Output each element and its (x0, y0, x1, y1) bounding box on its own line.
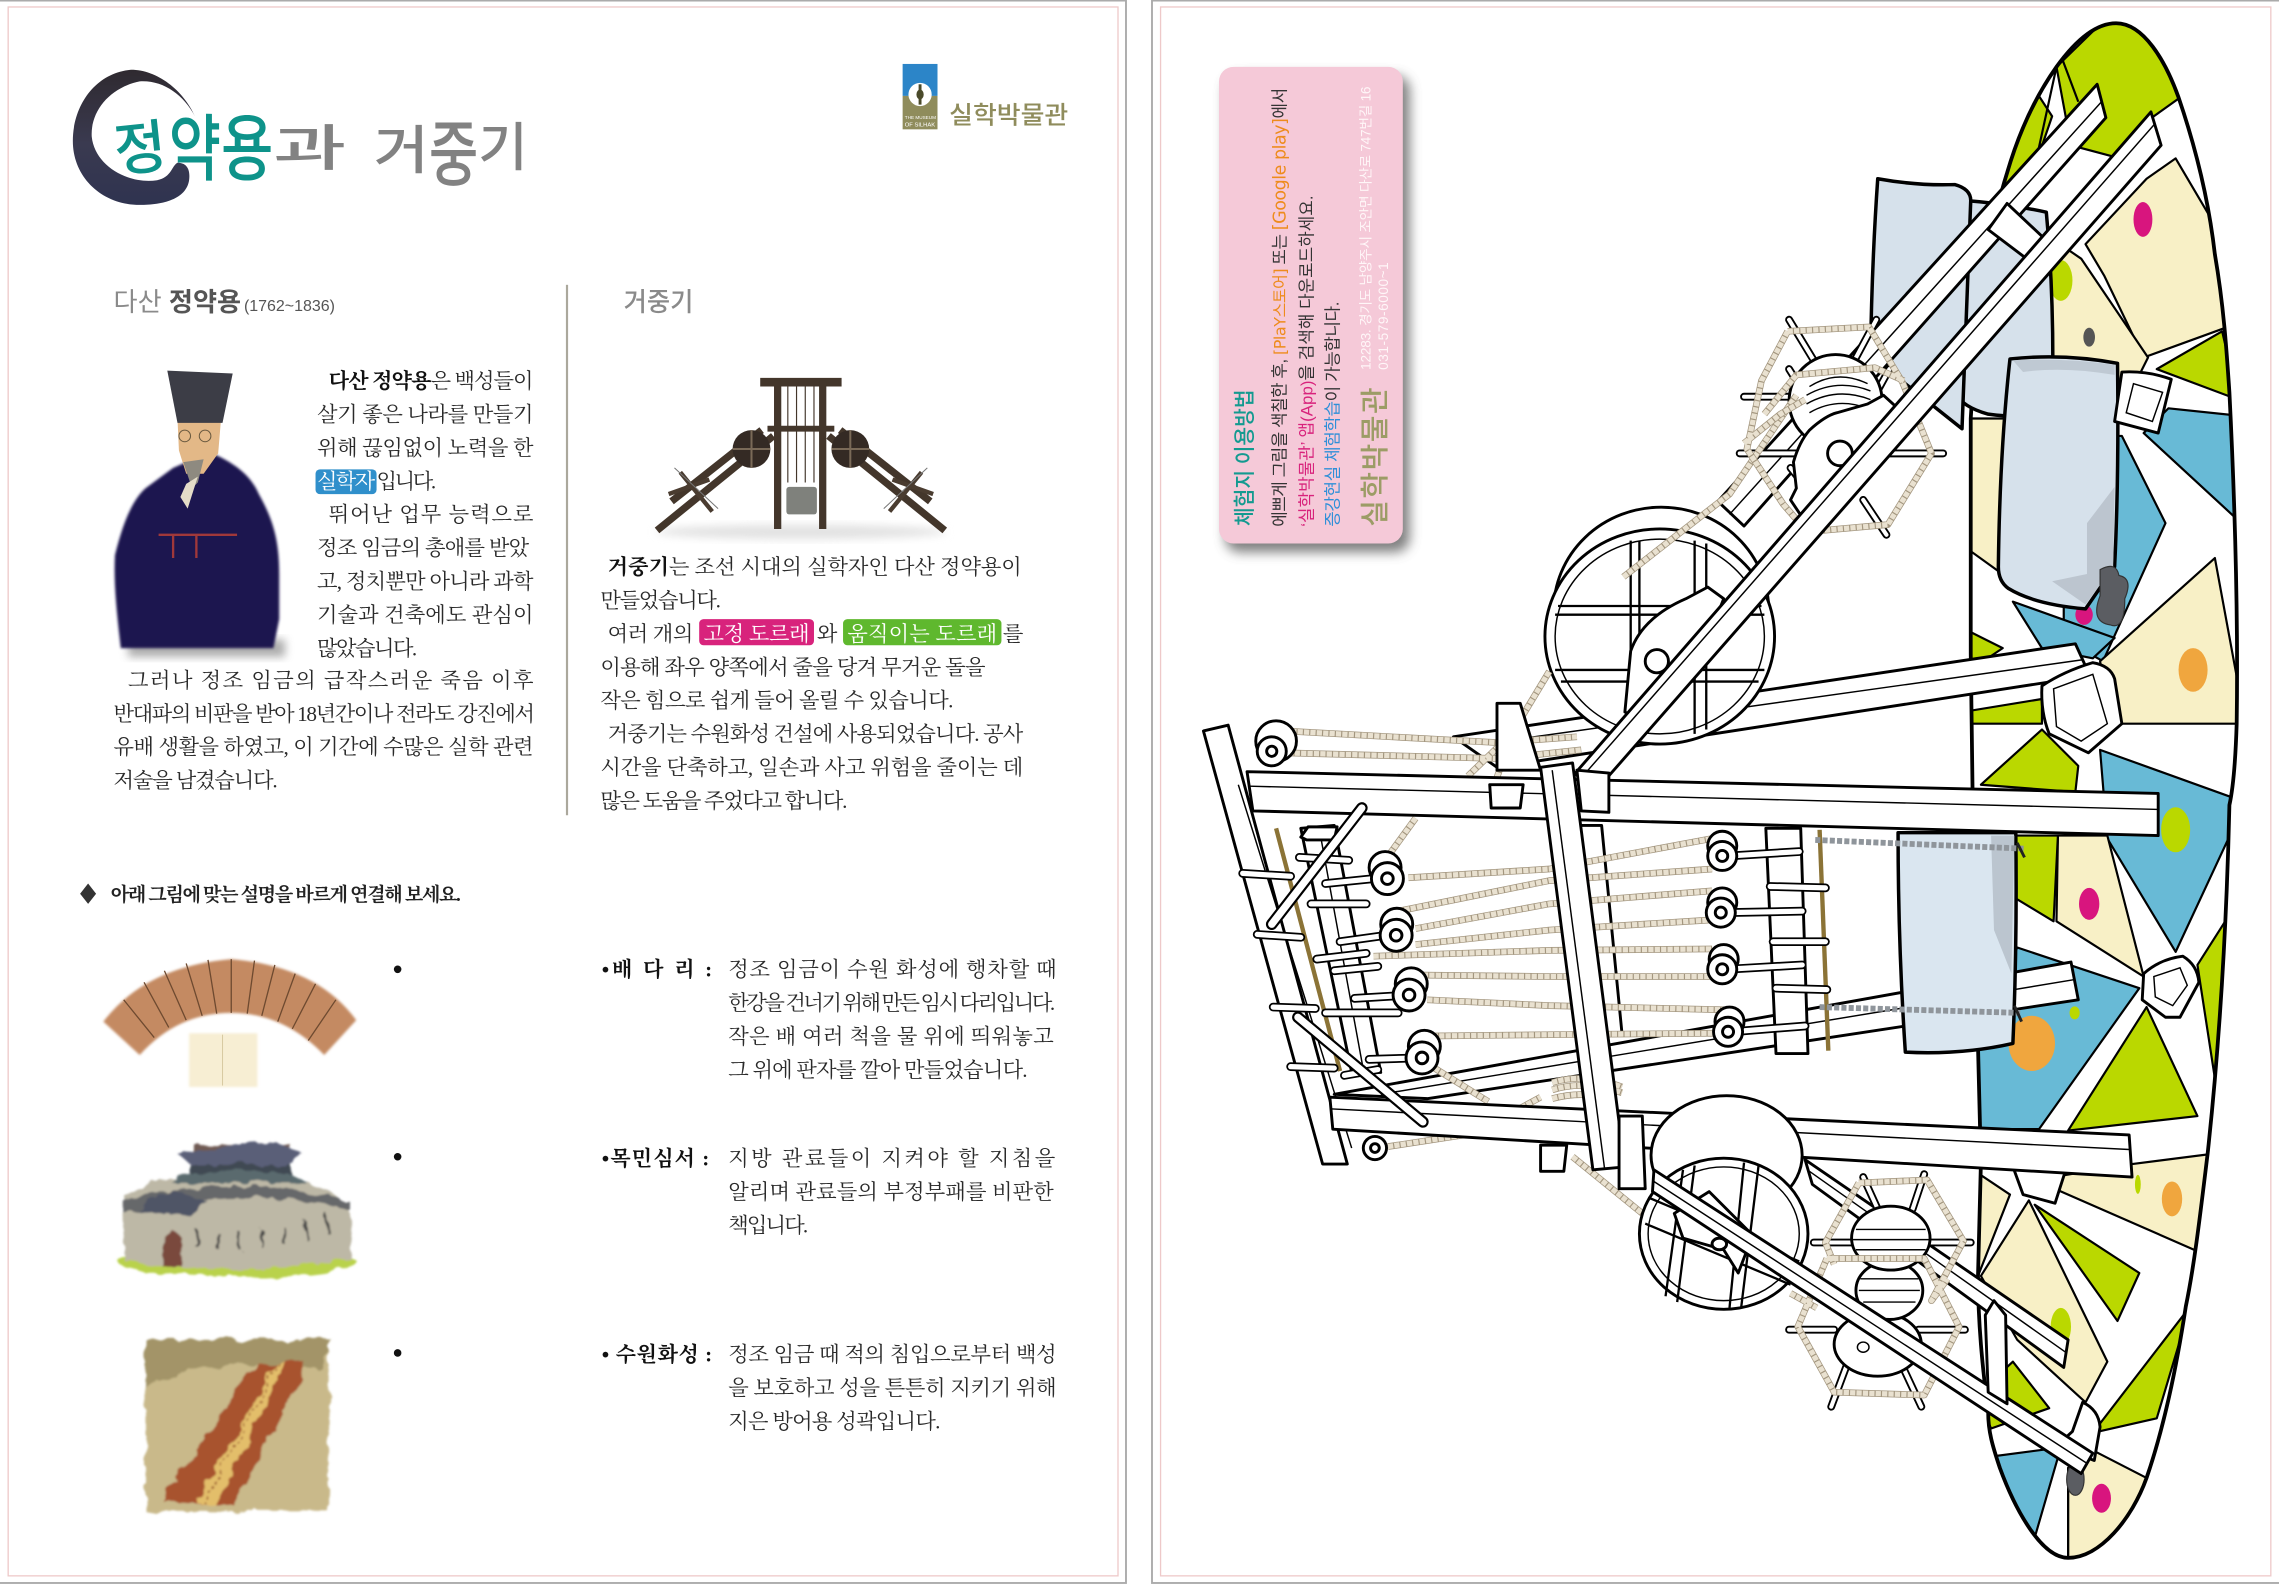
term: 수원화성: • 수원화성 : (602, 1343, 712, 1367)
icon: museum emblem: OF SILHAK (905, 122, 935, 128)
text block: 거중기 explanation: 만들었습니다. (600, 588, 721, 612)
icon: ink brush circle (73, 70, 195, 205)
title text: 정약용: 용 (221, 109, 273, 190)
text block: 거중기 explanation: 고정 도르래 (704, 622, 810, 646)
small blocks (1490, 770, 1645, 1189)
upper inner beam (1718, 84, 2106, 526)
text block: 거중기 explanation: 이용해 좌우 양쪽에서 줄을 당겨 무거운 돌을 (600, 655, 986, 679)
term: 배다리: 한강을 건너기 위해 만든 임시 다리입니다. (728, 991, 1055, 1015)
text block: 거중기 explanation: 를 (1003, 622, 1024, 646)
text block: 거중기 explanation: 거중기는 조선 시대의 실학자인 다산 정약용이 (608, 554, 1022, 579)
front stone on the oval (1998, 357, 2118, 609)
photo: geojunggi model (656, 381, 946, 539)
title text: 정약용: 정 (111, 114, 170, 184)
clamps on the oval (2011, 372, 2199, 1460)
suspended stone with chains (1815, 833, 2025, 1053)
icon: museum emblem (903, 64, 938, 129)
centre vertical post (1541, 763, 1625, 1170)
title text: 정약용: 약 (169, 109, 221, 190)
icon: diamond bullet (80, 884, 96, 904)
card instructions: ‘실학박물관’ 앱(App)을 검색해 다운로드하세요. (1297, 195, 1316, 527)
lower guide rail (1334, 962, 2078, 1099)
upper large wheel (1545, 507, 1775, 744)
text block: 정약용 biography: 위해 끊임없이 노력을 한 (317, 436, 534, 460)
museum name: 실학박물관 (1359, 387, 1392, 527)
term: 수원화성: 지은 방어용 성곽입니다. (728, 1410, 940, 1434)
card instructions: 증강현실 체험학습이 가능합니다. (1324, 302, 1343, 527)
wheel bracket and hub (1625, 395, 1901, 719)
term: 목민심서: 지방 관료들이 지켜야 할 지침을 (728, 1146, 1056, 1170)
right pulley column (1727, 828, 1827, 1054)
title text: 과 거중기: 중 (429, 115, 478, 196)
icon: museum emblem: THE MUSEUM (905, 115, 936, 120)
main upper arm beam (1574, 112, 2161, 777)
term: 배다리: 작은 배 여러 척을 물 위에 띄워놓고 (728, 1024, 1054, 1048)
highlight: 고정 도르래 (699, 619, 814, 645)
rope around lower winch (1791, 1180, 1963, 1395)
term: 배다리: •배 다 리 : (602, 958, 712, 982)
card heading: 체험지 이용방법 (1232, 389, 1257, 526)
upper long beam (1247, 772, 2158, 836)
right pulleys (1706, 831, 1744, 1046)
term: 목민심서: 책입니다. (728, 1213, 808, 1237)
text block: 거중기 explanation: 거중기는 수원화성 건설에 사용되었습니다. 공사 (608, 722, 1024, 746)
lower wheel back (1651, 1096, 1802, 1215)
heading: 다산 정약용: 다산 정약용 (1762~1836) (114, 287, 335, 317)
text block: 정약용 biography: 입니다. (377, 469, 436, 493)
address and phone: 12283. 경기도 남양주시 조안면 다산로 747번길 16 (1359, 86, 1374, 370)
text block: 정약용 biography: 기술과 건축에도 관심이 (317, 603, 534, 627)
text block: 정약용 biography: 뛰어난 업무 능력으로 (329, 503, 534, 527)
title text: 과 거중기: 기 (478, 120, 528, 178)
logo: museum of Silhak (903, 64, 1068, 130)
text block: 정약용 biography: 유배 생활을 하였고, 이 기간에 수많은 실학 관련 (114, 735, 534, 759)
upper guide rail (1453, 644, 2090, 767)
term: 수원화성 (602, 1343, 1057, 1434)
text block: 정약용 biography: 살기 좋은 나라를 만들기 (317, 402, 534, 426)
left pulleys (1369, 852, 1440, 1074)
connector dots (394, 966, 401, 1357)
column divider (566, 285, 568, 815)
title text: 정약용 (111, 109, 273, 190)
logo name: 실학박물관 (949, 102, 1068, 130)
title text: 과 거중기 (273, 115, 528, 196)
term: 목민심서 (602, 1146, 1056, 1237)
text block: 정약용 biography: 반대파의 비판을 받아 18년간이나 전라도 강진에서 (114, 702, 535, 726)
highlight: 움직이는 도르래 (843, 619, 1001, 645)
rope rows connecting pulleys (1373, 818, 1732, 1213)
text block: 정약용 biography: 정조 임금의 총애를 받았 (317, 536, 530, 560)
heading: 거중기: 거중기 (624, 287, 693, 317)
term: 목민심서: •목민심서 : (602, 1146, 709, 1170)
address and phone (1359, 86, 1391, 370)
text block: 거중기 explanation: 와 (817, 622, 838, 646)
diagonal handles (1272, 808, 1423, 1122)
text block: 거중기 explanation (600, 554, 1024, 813)
term: 수원화성: 정조 임금 때 적의 침입으로부터 백성 (728, 1343, 1057, 1367)
text block: 정약용 biography: 많았습니다. (317, 636, 417, 660)
lower spoked winch (1789, 1174, 1971, 1407)
text block: 정약용 biography: 그러나 정조 임금의 급작스러운 죽음 이후 (128, 668, 534, 692)
title: brush circle and calligraphy heading (73, 70, 528, 205)
text block: 거중기 explanation: 작은 힘으로 쉽게 들어 올릴 수 있습니다. (600, 689, 953, 713)
lower large wheel (1639, 1158, 1808, 1309)
left page frame (0, 1, 1126, 1583)
stones behind the arm (1870, 179, 2095, 429)
brown rods (1276, 828, 1828, 1071)
text block: 정약용 biography: 저술을 남겼습니다. (114, 769, 278, 793)
lower long beam (1330, 1097, 2132, 1177)
small block on upper arm (1497, 703, 1541, 770)
picture: Mokminsimseo books (103, 959, 356, 1087)
secondary rail beside centre post (1578, 825, 1622, 1033)
rocks (2067, 566, 2128, 1495)
text block: 정약용 biography (114, 369, 535, 793)
activity instruction: 아래 그림에 맞는 설명을 바르게 연결해 보세요. (111, 883, 461, 906)
colored dots (2009, 202, 2208, 1513)
right page frame (1152, 1, 2279, 1583)
text block: 거중기 explanation: 움직이는 도르래 (847, 622, 997, 646)
text block: 거중기 explanation: 많은 도움을 주었다고 합니다. (600, 789, 847, 813)
stained-glass oval background (1962, 7, 2245, 1569)
text block: 정약용 biography: 실학자 (317, 469, 376, 493)
text block: 정약용 biography: 고, 정치뿐만 아니라 과학 (317, 570, 534, 594)
card instructions (1271, 88, 1343, 527)
card instructions: 에쁘게 그림을 색칠한 후, [PlaY스토어] 또는 [Google play]에서 (1271, 88, 1291, 527)
lower inner beam (1805, 1160, 2068, 1367)
text block: 거중기 explanation: 여러 개의 (608, 622, 693, 646)
main lower arm beam (1652, 1170, 2093, 1474)
portrait of Jeong Yak-yong (115, 371, 285, 657)
address and phone: 031-579-6000~1 (1376, 262, 1391, 370)
upper spoked winch (1740, 320, 1943, 535)
title text: 과 거중기: 과 (273, 122, 346, 177)
picture: Suwon Hwaseong fortress (118, 1142, 356, 1277)
top left pulley (1256, 721, 1296, 766)
term: 배다리: 그 위에 판자를 깔아 만들었습니다. (728, 1058, 1028, 1082)
picture: royal procession on the boat bridge (146, 1340, 332, 1511)
text block: 정약용 biography: 다산 정약용은 백성들이 (329, 369, 534, 393)
title text: 과 거중기: 거 (374, 123, 429, 181)
term: 목민심서: 알리며 관료들의 부정부패를 비판한 (728, 1180, 1054, 1204)
term: 배다리: 정조 임금이 수원 화성에 행차할 때 (728, 958, 1057, 982)
term: 배다리 (602, 958, 1057, 1082)
text block: 거중기 explanation: 시간을 단축하고, 일손과 사고 위험을 줄이는 데 (600, 756, 1023, 780)
term: 수원화성: 을 보호하고 성을 튼튼히 지키기 위해 (728, 1376, 1057, 1400)
card: how to use the activity sheet (1219, 67, 1410, 552)
vertical pin on the lower arm (1985, 1301, 2007, 1404)
left upright post (1203, 725, 1352, 1164)
rope around upper winch and wheel (1282, 327, 1932, 777)
bottom left pulley (1363, 1136, 1387, 1160)
illustration: coloring picture of the geojunggi (1203, 7, 2245, 1569)
left pulley column (1243, 825, 1417, 1075)
